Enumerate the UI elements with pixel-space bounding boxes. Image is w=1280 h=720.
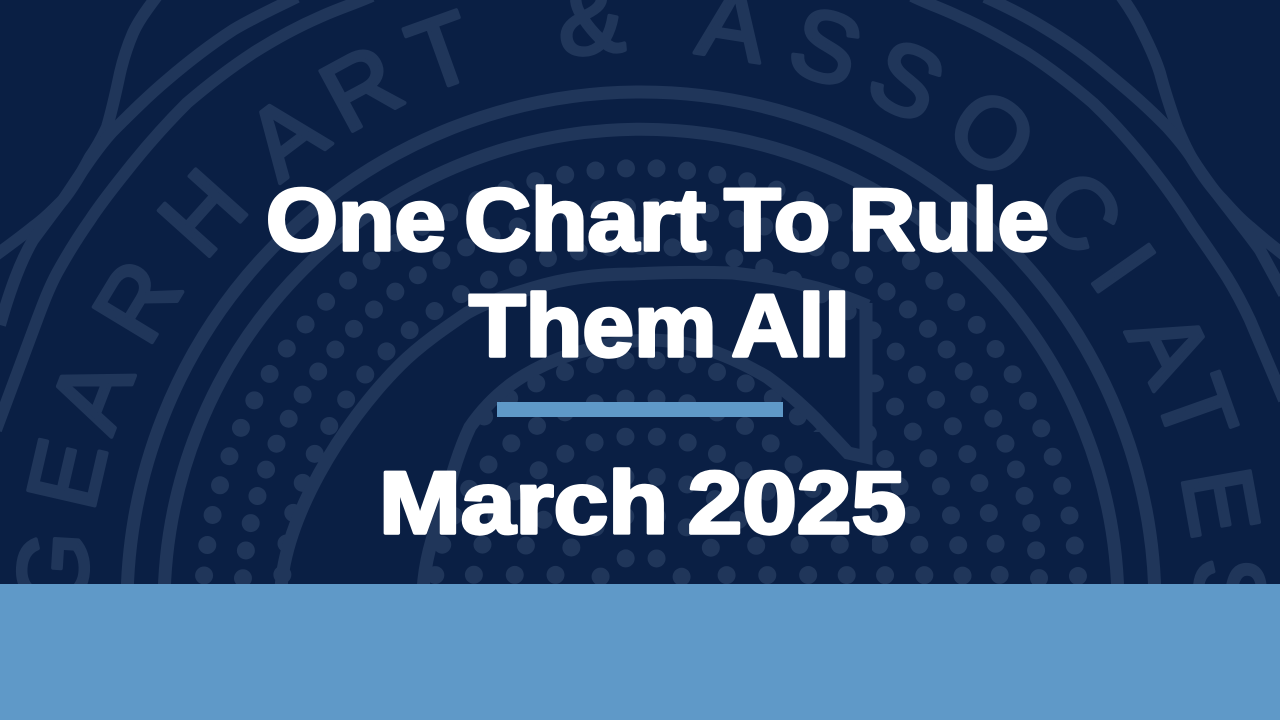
- seal lettering: GEARHART & ASSOCIATES: A: [1106, 293, 1235, 401]
- seal lettering: GEARHART & ASSOCIATES: I: [1071, 225, 1177, 311]
- seal lettering: GEARHART & ASSOCIATES: S: [852, 15, 961, 144]
- seal double ring: [127, 92, 1155, 606]
- divider bar: [497, 402, 783, 417]
- seal lettering: GEARHART & ASSOCIATES: A: [27, 343, 155, 445]
- seal dot rows: [203, 168, 1079, 606]
- seal inner emblem: [281, 272, 868, 590]
- date: March 2025: [379, 453, 906, 552]
- seal lettering: GEARHART & ASSOCIATES: R: [303, 22, 418, 153]
- title: [266, 170, 1049, 375]
- seal lettering: GEARHART & ASSOCIATES: E: [1161, 459, 1280, 544]
- bottom band: [0, 584, 1280, 720]
- seal lettering: GEARHART & ASSOCIATES: C: [1014, 148, 1144, 275]
- seal lettering: GEARHART & ASSOCIATES: A: [226, 72, 345, 200]
- title: One Chart To Rule: [266, 170, 1049, 269]
- seal lettering: GEARHART & ASSOCIATES: H: [137, 149, 267, 276]
- title: Them All: [469, 276, 850, 375]
- seal lettering: GEARHART & ASSOCIATES: R: [71, 241, 203, 360]
- seal lettering: GEARHART & ASSOCIATES: O: [928, 65, 1056, 200]
- seal lettering: GEARHART & ASSOCIATES: E: [5, 429, 128, 518]
- seal lettering: GEARHART & ASSOCIATES: T: [1134, 362, 1259, 456]
- seal outer scalloped border: [0, 0, 1280, 430]
